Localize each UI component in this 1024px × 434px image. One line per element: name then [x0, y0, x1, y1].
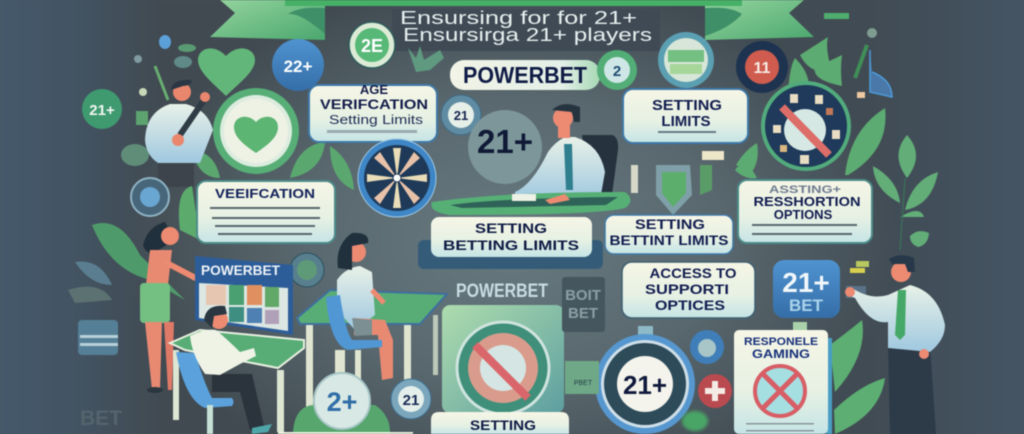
- panel: green side block: PBET: [574, 380, 593, 387]
- prohibited roulette: [761, 81, 851, 171]
- card: access to support: SUPPORTI: [645, 281, 729, 297]
- chip: 2: 2: [613, 63, 621, 80]
- badge: 21+ bet: BET: [789, 296, 824, 315]
- standing man right: [845, 255, 945, 434]
- chip: 21 lower: 21: [403, 392, 419, 409]
- card: access to support: ACCESS TO: [650, 265, 737, 281]
- pill: powerbet: POWERBET: [463, 62, 587, 88]
- paper: responsible gaming: [734, 322, 832, 434]
- standing woman: [140, 222, 205, 393]
- leaves behind big ring: [121, 142, 354, 190]
- chip: 2: [597, 50, 637, 90]
- card: setting limits: SETTING: [652, 97, 722, 114]
- card: age verification: AGE: [360, 82, 388, 97]
- card: bot bet: [562, 277, 605, 332]
- chip: left blue: [131, 178, 169, 216]
- badge: 22+: [272, 39, 324, 91]
- card: setting betting limits: SETTING: [475, 220, 547, 236]
- icon: stacked box: [78, 320, 118, 355]
- icon: heart: [198, 48, 255, 96]
- paper: responsible gaming: RESPONELE: [744, 336, 818, 348]
- desk and seated player: [170, 306, 304, 434]
- badge: red plus: [698, 374, 732, 408]
- leaves left of scene: [68, 223, 185, 303]
- title: Ensursirga 21+ players: [403, 25, 652, 45]
- icon: decorative left items: [134, 35, 196, 125]
- decorative right marks: [824, 13, 892, 98]
- person with paintbrush: [145, 80, 213, 187]
- dart wheel: [358, 139, 436, 217]
- leaves lower right: [830, 320, 885, 434]
- paper: responsible gaming: GAMING: [752, 347, 810, 361]
- card: age verification: Setting Limits: [329, 112, 424, 127]
- badge: 22+: 22+: [284, 57, 312, 76]
- chip: 2+: [293, 373, 390, 432]
- leaf cluster: [408, 46, 444, 72]
- card: setting betting limits: BETTING LIMITS: [443, 237, 579, 253]
- card: access to support: OPTICES: [655, 297, 725, 313]
- badge: 2E: 2E: [361, 36, 383, 56]
- badge: 21+ bet: 21+: [782, 267, 830, 298]
- ring with heart: [213, 88, 299, 174]
- badge: small blue: [690, 330, 724, 364]
- title ribbon: [210, 0, 814, 40]
- panel: powerbet roulette: POWERBET: [456, 281, 548, 302]
- card: bot bet: BOIT: [565, 287, 601, 304]
- chip: 21 lower: [391, 379, 431, 419]
- card: assessment options: ASSTING+: [769, 184, 841, 196]
- card: setting bettint limits: [605, 215, 733, 254]
- card: assessment options: OPTIONS: [774, 207, 833, 222]
- table and seated woman: [297, 233, 447, 434]
- badge: 21+ large: 21+: [477, 123, 533, 160]
- chip: 2+: 2+: [327, 387, 357, 417]
- chip: 21: [441, 95, 481, 135]
- panel: powerbet roulette: [442, 281, 564, 414]
- ring: 21+: [595, 326, 695, 434]
- faint text: bet: BET: [80, 407, 122, 430]
- title: Ensursing for for 21+: [400, 8, 637, 28]
- shield icon group: [631, 151, 724, 215]
- badge: 21+ large: [468, 110, 542, 184]
- chip: 11: 11: [754, 60, 771, 77]
- card: verification: [179, 181, 335, 243]
- blob: green: [682, 411, 708, 431]
- chip: 11: [736, 41, 788, 93]
- card: setting betting limits: [418, 217, 603, 269]
- card: assessment options: [738, 180, 872, 243]
- panel: green side block: [565, 361, 599, 394]
- label: setting: [431, 412, 569, 434]
- card at base: [278, 432, 413, 434]
- plant right: [873, 135, 938, 250]
- card: assessment options: RESSHORTION: [754, 194, 860, 209]
- card: access to support: [622, 262, 755, 318]
- badge: 21+ green: 21+: [89, 102, 115, 119]
- chip: 21: 21: [454, 108, 468, 123]
- badge: 21+ green: [82, 89, 122, 129]
- ring: 21+: 21+: [623, 370, 667, 400]
- card: setting limits: [623, 89, 748, 143]
- title: [392, 8, 660, 51]
- label: setting: SETTING: [470, 417, 536, 433]
- ring icon with card: [658, 32, 714, 88]
- card: bot bet: BET: [568, 305, 598, 322]
- card: setting bettint limits: SETTING: [635, 216, 705, 232]
- card: setting bettint limits: BETTINT LIMITS: [610, 232, 728, 248]
- circle chip near monitor: [290, 253, 324, 287]
- badge: 2E: [349, 22, 395, 68]
- card: verification: VEEIFCATION: [215, 186, 315, 201]
- card: age verification: VERIFCATION: [320, 96, 428, 112]
- seated man at desk: [431, 104, 630, 215]
- card: setting limits: LIMITS: [661, 113, 711, 130]
- leaves upper right: [735, 37, 886, 178]
- card: age verification: [309, 82, 437, 142]
- monitor: powerbet: [195, 256, 293, 335]
- monitor: powerbet: POWERBET: [201, 262, 280, 278]
- badge: 21+ bet: [773, 260, 840, 318]
